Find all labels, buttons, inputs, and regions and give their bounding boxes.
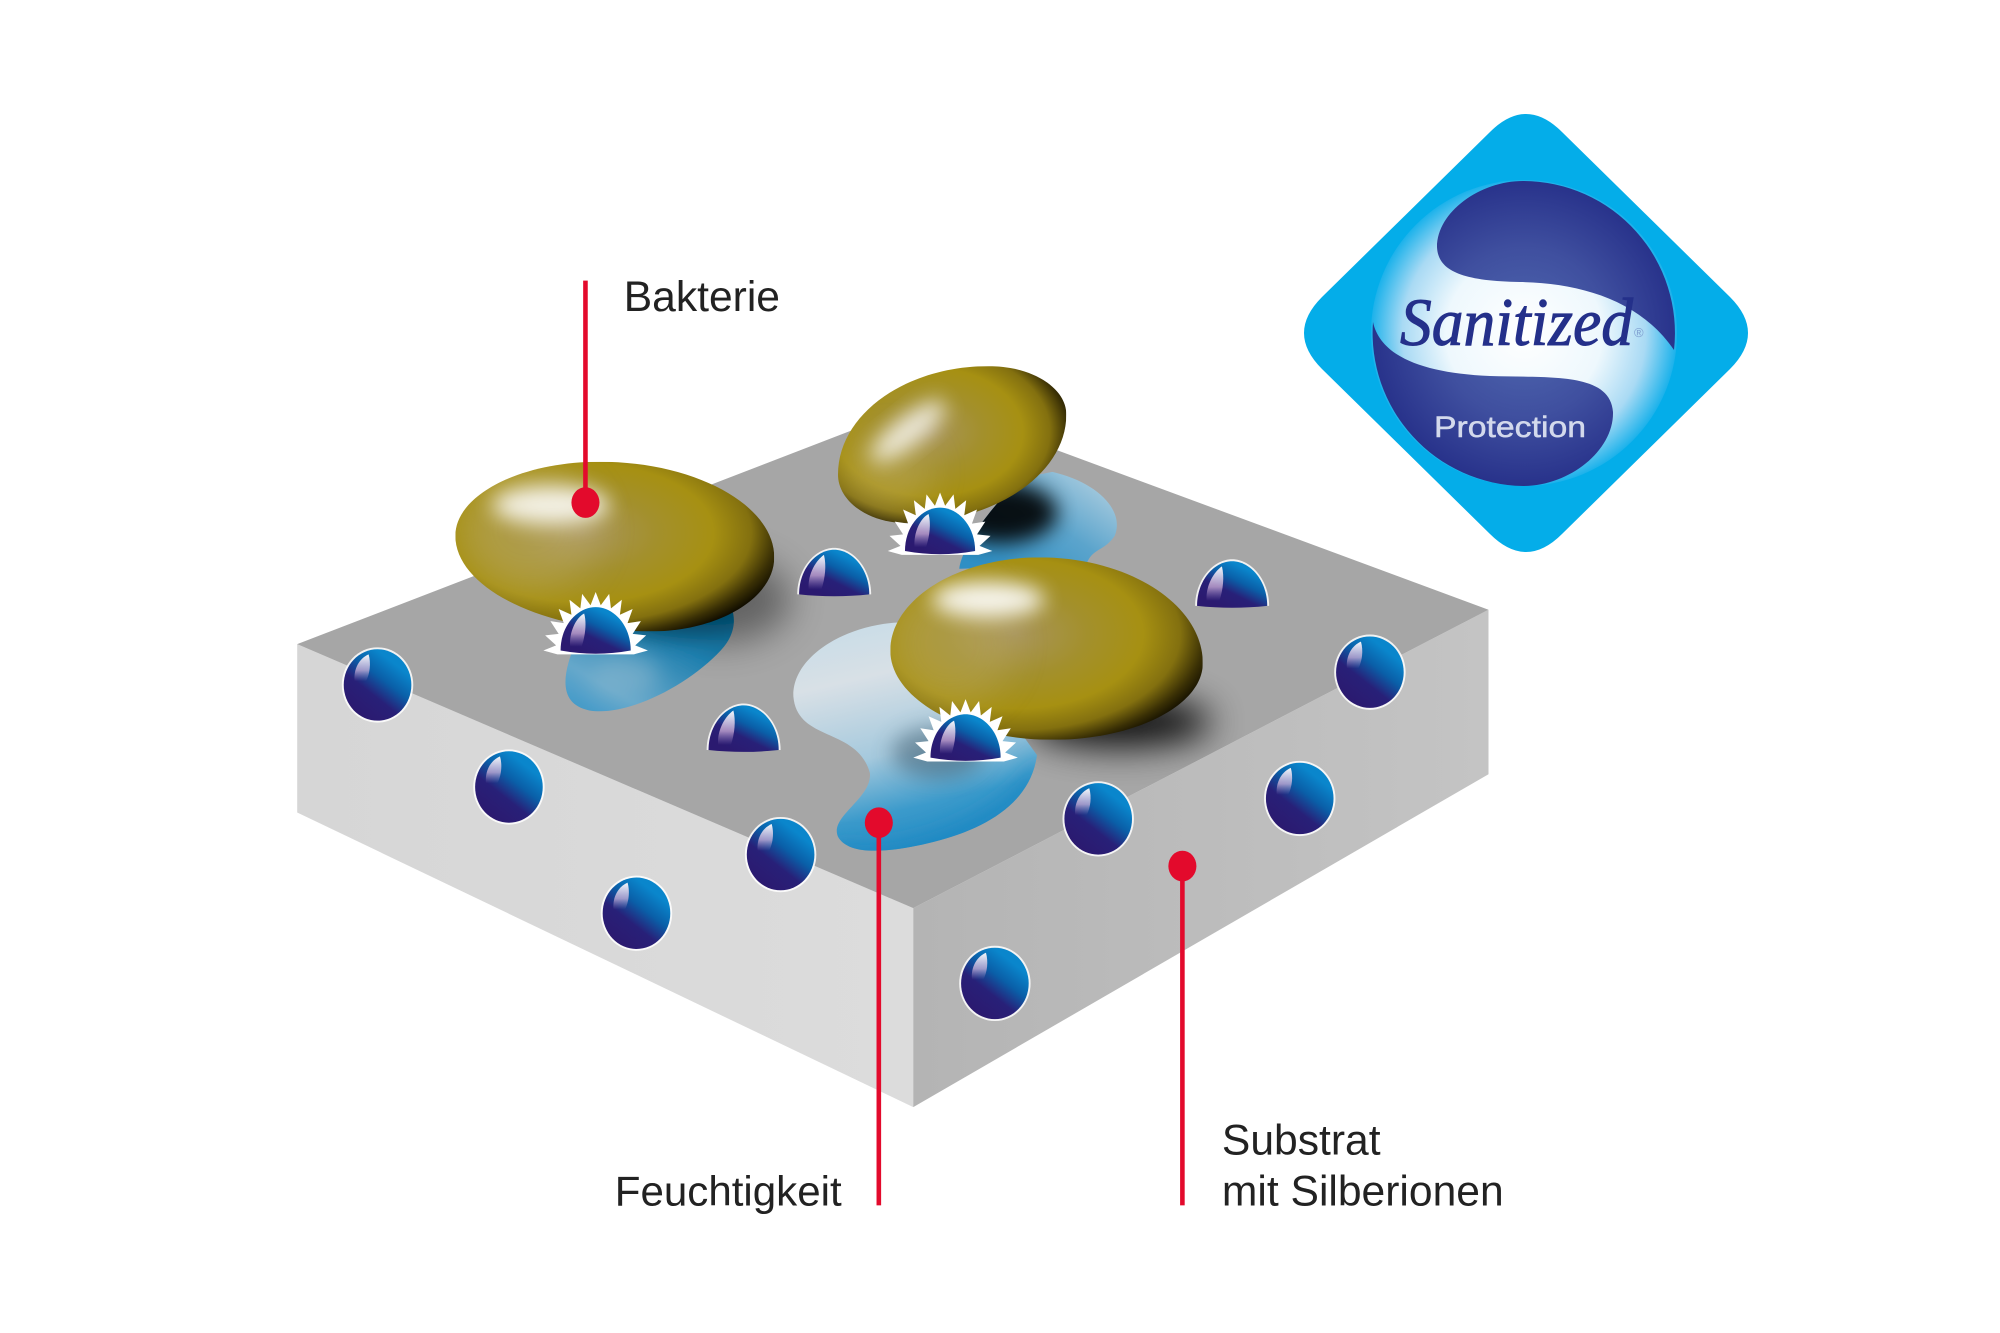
main illustration: substrate block with bacteria bbox=[297, 273, 1504, 1215]
bacterium: back bbox=[838, 366, 1066, 523]
moisture puddles and bacteria shadows bbox=[548, 466, 1212, 867]
logo: upper swirl bbox=[1437, 181, 1675, 350]
logo: registered mark: ® bbox=[1634, 325, 1644, 340]
Sanitized Protection logo bbox=[1304, 114, 1748, 552]
logo: blue diamond bbox=[1304, 114, 1748, 552]
label: Substrat mit Silberionen: Substrat bbox=[1222, 1116, 1381, 1164]
bacterium: front bbox=[886, 557, 1203, 740]
silver ions attacking bacteria (spiked domes) bbox=[543, 492, 1018, 761]
logo: wordmark: Sanitized bbox=[1400, 284, 1634, 360]
label: Bakterie: Bakterie bbox=[624, 273, 780, 321]
label: Feuchtigkeit: Feuchtigkeit bbox=[615, 1167, 842, 1214]
logo: Protection: Protection bbox=[1434, 411, 1586, 444]
moisture puddle: centre bbox=[793, 622, 1037, 851]
bacterium: left bbox=[455, 462, 774, 631]
leader: Bakterie bbox=[571, 281, 599, 518]
leader: Feuchtigkeit bbox=[865, 807, 893, 1205]
label: Substrat mit Silberionen: mit Silberionen bbox=[1222, 1167, 1504, 1215]
silver ions in substrate (spheres) bbox=[342, 635, 1406, 1021]
logo: circle bbox=[1371, 180, 1677, 486]
leader: Substrat bbox=[1168, 851, 1196, 1205]
silver ions on surface (domes) bbox=[707, 548, 1269, 752]
substrate block bbox=[297, 402, 1489, 1107]
logo: lower swirl bbox=[1373, 322, 1613, 486]
